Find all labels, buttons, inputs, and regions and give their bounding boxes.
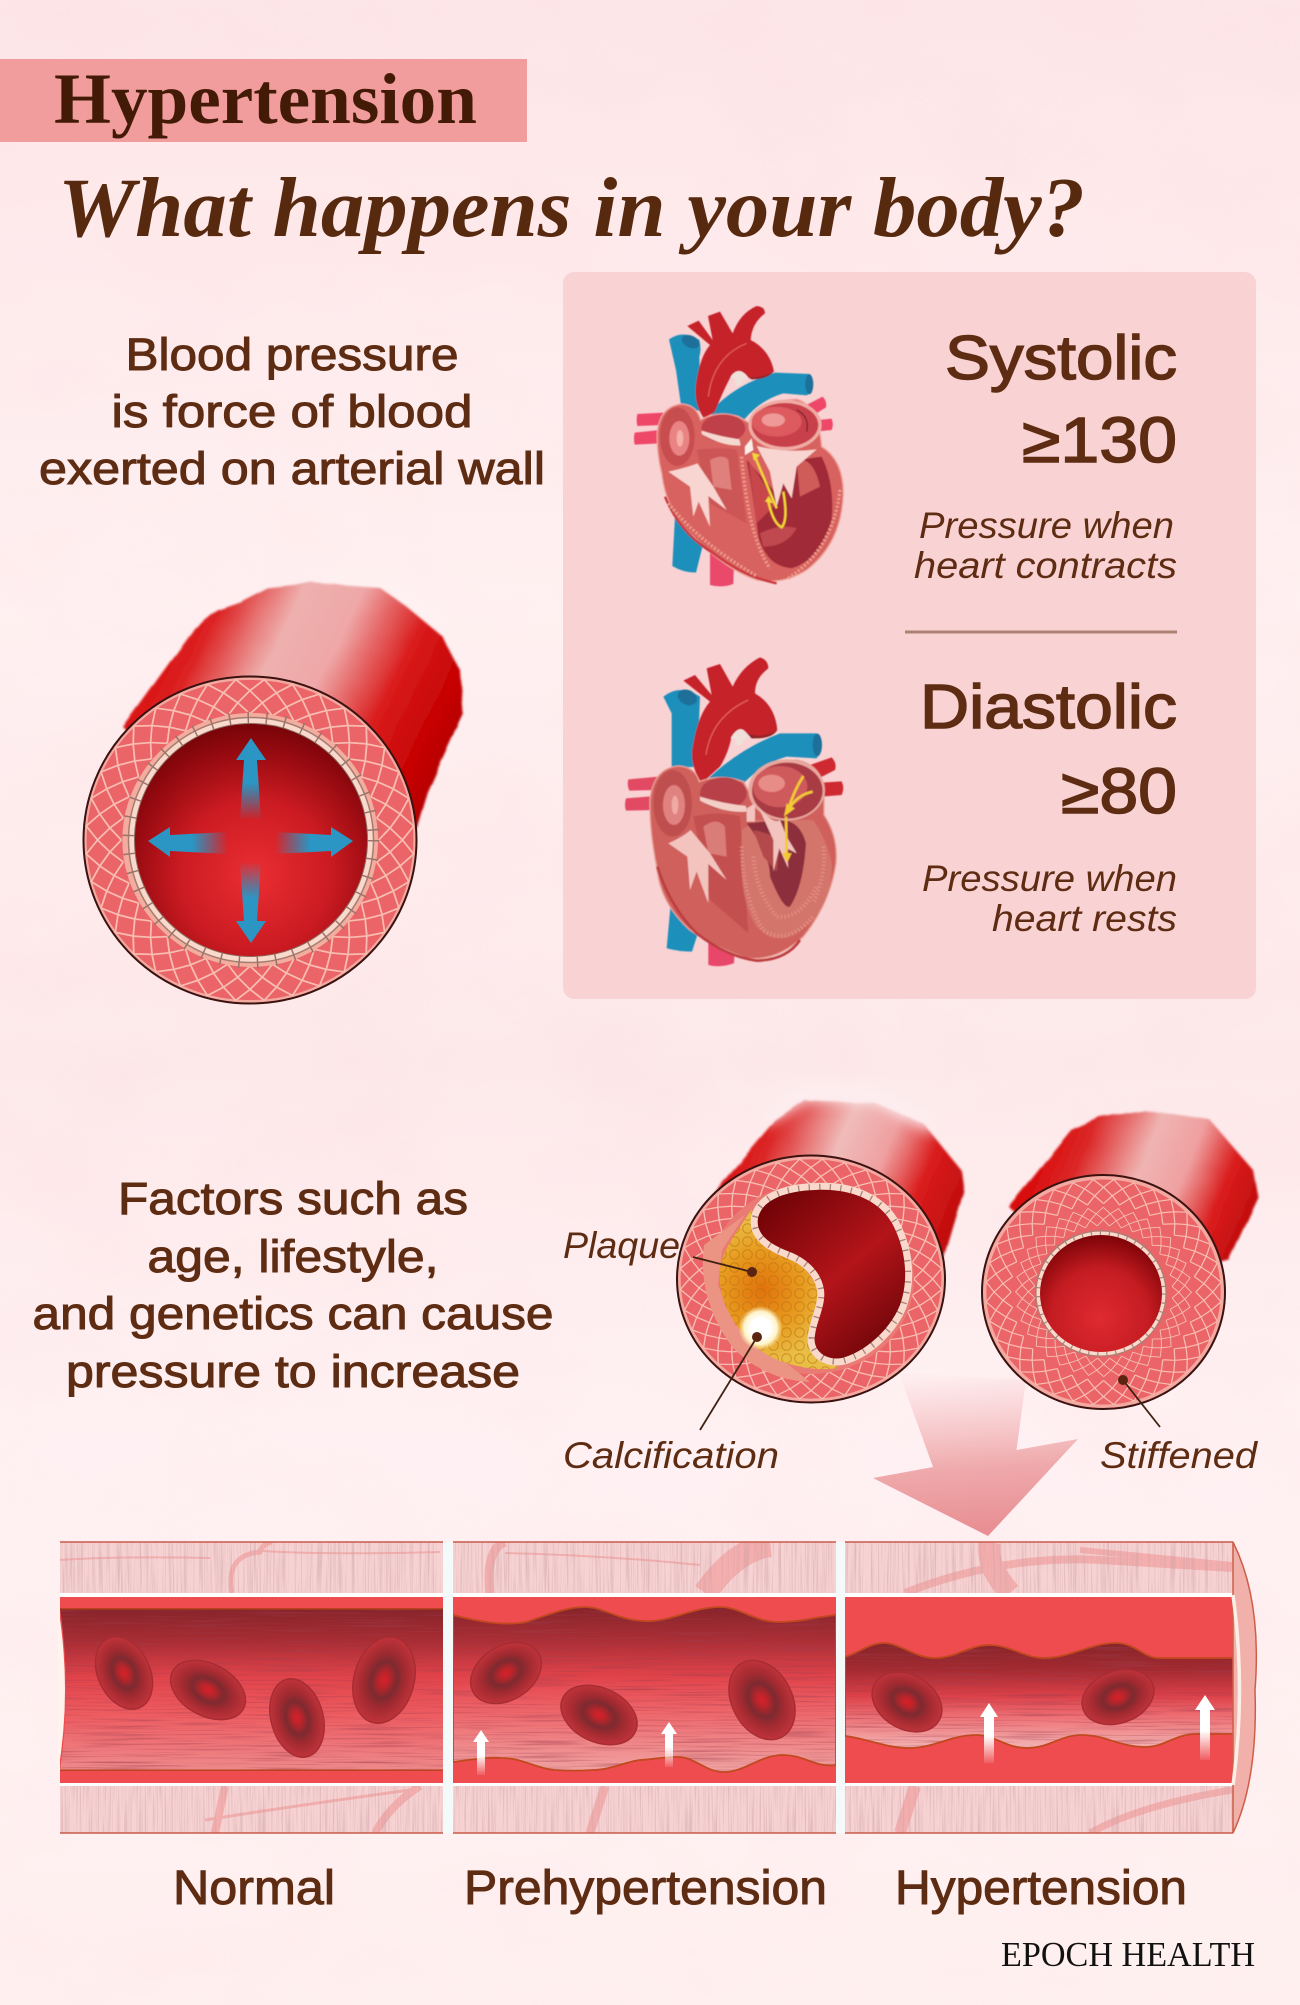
heart illustration: diastolic — [625, 657, 843, 966]
illustration: artery with plaque — [666, 1092, 964, 1412]
label: Calcification with leader — [563, 1332, 779, 1476]
label: Plaque with leader: Plaque — [563, 1225, 680, 1266]
text: Diastolic: Pressure when — [922, 858, 1177, 899]
panel: prehypertension flow — [453, 1607, 836, 1772]
arrow: damaged arteries lead to hypertension — [873, 1373, 1078, 1536]
text block: factors that raise pressure: age, lifestyle, — [148, 1231, 438, 1282]
panel: systolic and diastolic — [563, 272, 1256, 999]
illustration: artery cross-section with pressure arrows — [68, 583, 463, 1019]
label: Hypertension: Hypertension — [895, 1862, 1187, 1915]
heading: What happens in your body?: What happens in your body? — [58, 161, 1085, 255]
text: Systolic: heart contracts — [914, 545, 1177, 586]
text: Diastolic: Diastolic — [920, 673, 1177, 742]
title banner: Hypertension: Hypertension — [54, 59, 477, 139]
label: Prehypertension: Prehypertension — [464, 1862, 827, 1915]
plaque deposit — [720, 1210, 838, 1369]
text: Systolic — [914, 324, 1177, 586]
label: Stiffened with leader: Stiffened — [1100, 1435, 1259, 1476]
text block: factors that raise pressure: and genetics can cause — [32, 1288, 554, 1339]
text: Systolic: Systolic — [945, 324, 1177, 393]
panel: normal flow — [60, 1608, 443, 1771]
label: Normal: Normal — [173, 1862, 335, 1915]
text: Diastolic: heart rests — [992, 898, 1177, 939]
text block: factors that raise pressure — [32, 1173, 554, 1397]
credit: Epoch Health: EPOCH HEALTH — [1001, 1935, 1255, 1974]
label: Stiffened with leader — [1100, 1375, 1259, 1476]
illustration: stiffened artery — [973, 1110, 1258, 1417]
chart: blood vessel at three pressure stages — [58, 1542, 1256, 1833]
white pressure arrows — [473, 1695, 1215, 1775]
text: Diastolic: ≥80 — [1061, 755, 1177, 827]
text: Systolic: ≥130 — [1022, 404, 1177, 476]
artery muscle layer — [60, 1597, 1240, 1783]
label: Plaque with leader — [563, 1225, 757, 1277]
text block: definition of blood pressure: exerted on arterial wall — [39, 443, 545, 494]
text block: definition of blood pressure: Blood pressure — [126, 329, 458, 380]
pressure arrows — [148, 738, 353, 943]
text block: factors that raise pressure: Factors such as — [118, 1173, 468, 1224]
vessel outer walls — [60, 1542, 1233, 1833]
text: Diastolic — [920, 673, 1177, 939]
text block: definition of blood pressure — [39, 329, 545, 494]
vessel edges and end cap — [58, 1542, 1256, 1833]
red blood cells — [84, 1628, 1162, 1763]
text block: definition of blood pressure: is force of blood — [112, 386, 472, 437]
label: Calcification with leader: Calcification — [563, 1435, 779, 1476]
heart illustration: systolic — [634, 306, 843, 586]
text: Systolic: Pressure when — [919, 505, 1174, 546]
text block: factors that raise pressure: pressure to increase — [66, 1346, 520, 1397]
panel: hypertension flow — [845, 1643, 1240, 1748]
